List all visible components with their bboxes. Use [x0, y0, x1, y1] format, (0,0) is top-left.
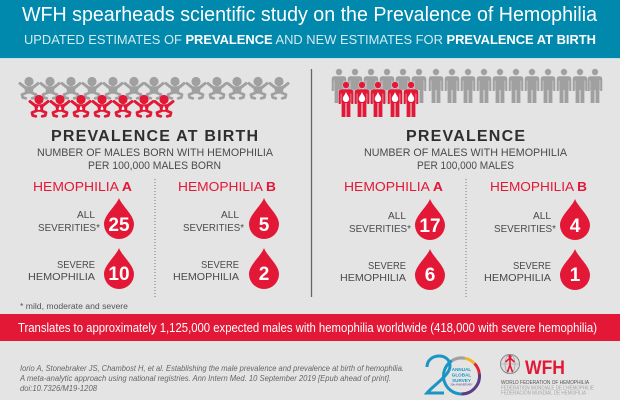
label: severe hemophilia [173, 259, 239, 283]
label: all severities [183, 209, 244, 234]
label: severe hemophilia [28, 259, 95, 283]
footnote: * mild, moderate and severe [20, 302, 129, 311]
label: severe hemophilia: SEVERE [513, 260, 551, 272]
logo: 20 annual global survey: 20th ANNIVERSARY [450, 384, 473, 386]
citation: Iorio A, Stonebraker JS, Chambost H, et al. Establishing the male prevalence and prevalence at birth of hemophilia. [20, 364, 404, 373]
citation: A meta-analytic approach using national registries. Ann Intern Med. 10 September 2019 [Epub ahead of print]. [19, 374, 391, 383]
label: severe hemophilia [340, 260, 406, 284]
drop: 25: 25 [108, 215, 130, 236]
column: hemophilia A prevalence [340, 179, 445, 290]
drop: 2: 2 [259, 264, 269, 285]
drop: 6: 6 [425, 265, 435, 286]
heading: prevalence at birth: PREVALENCE AT BIRTH [51, 128, 258, 145]
column: hemophilia B at birth [173, 179, 279, 289]
heading: hemophilia A: HEMOPHILIA A [33, 179, 133, 194]
icon row: red babies [30, 95, 173, 116]
column: hemophilia A at birth [28, 179, 134, 289]
citation: doi:10.7326/M19-1208 [20, 384, 98, 393]
heading: hemophilia A: HEMOPHILIA A [344, 179, 444, 194]
organisation names: WORLD FEDERATION OF HEMOPHILIA [501, 380, 589, 386]
citation [19, 364, 404, 393]
logo: 20 annual global survey: ANNUAL [452, 367, 471, 372]
organisation names [501, 380, 594, 396]
label: all severities: ALL [388, 210, 406, 222]
wordmark: WFH [525, 358, 565, 379]
label: all severities [349, 210, 411, 235]
description: prevalence: PER 100,000 MALES [417, 160, 514, 172]
header banner [0, 0, 620, 59]
logo: 20 annual global survey: GLOBAL [452, 372, 471, 378]
label: severe hemophilia: HEMOPHILIA [484, 272, 551, 284]
label: all severities: SEVERITIES* [38, 222, 100, 234]
label: all severities: ALL [221, 209, 239, 221]
label: severe hemophilia [484, 260, 551, 284]
callout bar [0, 314, 620, 341]
panel: prevalence at birth [20, 77, 288, 289]
label: severe hemophilia: SEVERE [57, 259, 95, 271]
column: hemophilia B prevalence [484, 179, 590, 290]
label: severe hemophilia: HEMOPHILIA [173, 271, 239, 283]
label: all severities: ALL [533, 210, 551, 222]
label: all severities [494, 210, 556, 235]
description: prevalence at birth [37, 147, 274, 172]
label: all severities: SEVERITIES* [183, 222, 244, 234]
drop: 1: 1 [570, 265, 581, 286]
drop: 4: 4 [570, 216, 581, 237]
drop: 10: 10 [108, 264, 130, 285]
label: severe hemophilia: SEVERE [368, 260, 406, 272]
label: severe hemophilia: SEVERE [201, 259, 239, 271]
label: all severities: SEVERITIES* [494, 223, 556, 235]
description: prevalence at birth: PER 100,000 MALES BORN [88, 160, 221, 172]
logo: 20 annual global survey: SURVEY [452, 378, 471, 383]
icon: globe with figure [500, 354, 520, 374]
logo: WFH [500, 354, 594, 396]
heading: hemophilia B: HEMOPHILIA B [178, 179, 276, 194]
description: prevalence: NUMBER OF MALES WITH HEMOPHILIA [364, 147, 568, 159]
heading: prevalence: PREVALENCE [406, 128, 525, 145]
label: all severities: SEVERITIES* [349, 223, 411, 235]
label: all severities: ALL [77, 209, 95, 221]
drop: 17: 17 [419, 216, 441, 237]
subtitle: UPDATED ESTIMATES OF PREVALENCE AND NEW ESTIMATES FOR PREVALENCE AT BIRTH [24, 32, 596, 47]
organisation names: FEDERACIÓN MUNDIAL DE HEMOFILIA [501, 390, 586, 396]
heading: hemophilia B: HEMOPHILIA B [490, 179, 587, 194]
icon row: gray babies [20, 77, 288, 98]
icon row: gray men [332, 69, 602, 103]
logo: 20 annual global survey [427, 356, 480, 394]
drop: 5: 5 [259, 215, 270, 236]
label: severe hemophilia: HEMOPHILIA [28, 271, 95, 283]
label: all severities [38, 209, 100, 234]
label: severe hemophilia: HEMOPHILIA [340, 272, 406, 284]
title: WFH spearheads scientific study on the Prevalence of Hemophilia [22, 4, 598, 26]
description: prevalence at birth: NUMBER OF MALES BORN WITH HEMOPHILIA [37, 147, 274, 159]
panel: prevalence [332, 69, 602, 290]
icon row: red men [339, 82, 418, 117]
description: prevalence [364, 147, 568, 172]
organisation names: FÉDÉRATION MONDIALE DE L’HÉMOPHILIE [501, 384, 594, 392]
